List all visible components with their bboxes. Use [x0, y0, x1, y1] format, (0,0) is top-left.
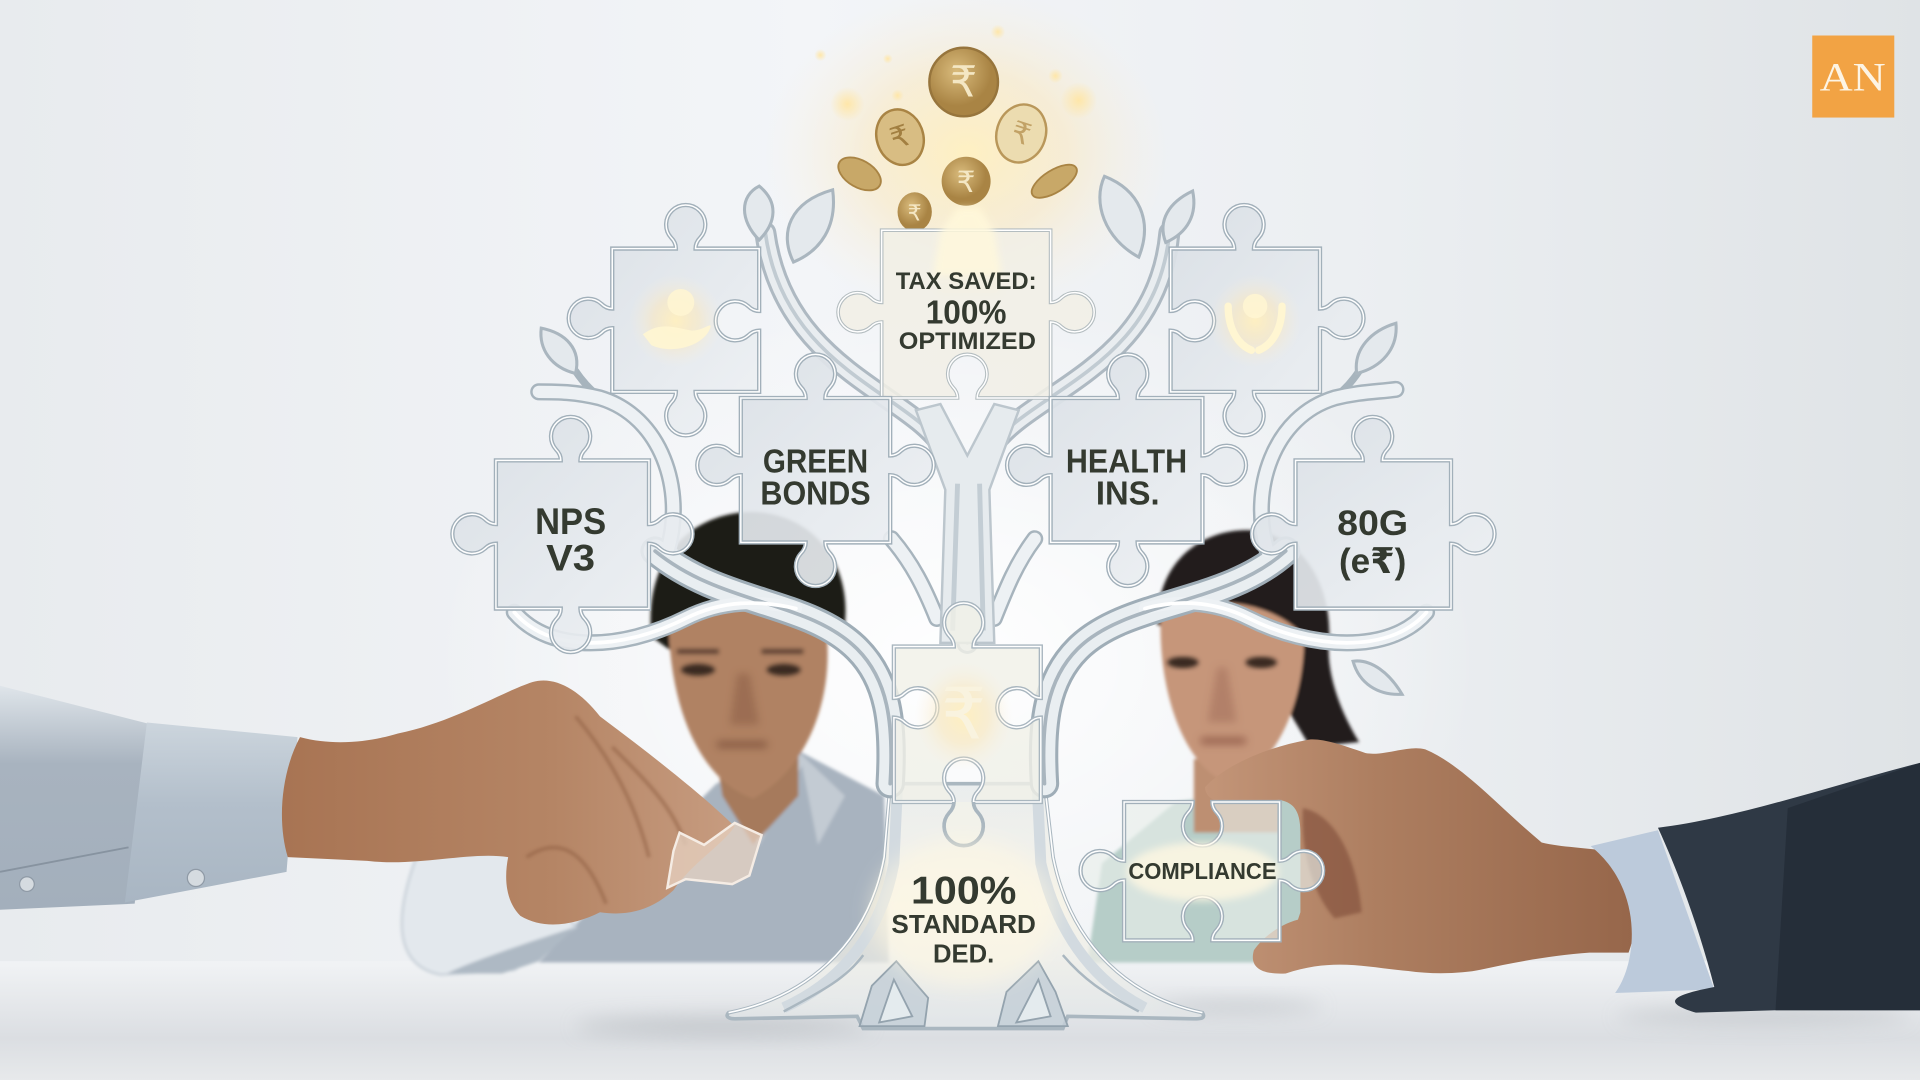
coin: top: ₹	[950, 58, 977, 108]
glass leaves	[541, 176, 1402, 694]
sleeve fold line	[0, 847, 129, 872]
label: tax saved: 100%	[926, 294, 1007, 331]
cuff buttons	[20, 869, 204, 891]
rupee coins	[833, 48, 1082, 231]
man torso	[539, 749, 889, 962]
golden glow	[765, 0, 1169, 318]
label: tax saved: OPTIMIZED	[899, 328, 1036, 355]
coin: middle: ₹	[957, 165, 975, 199]
label: 80g e-rupee	[1337, 503, 1408, 581]
man behind the tree	[402, 512, 889, 975]
coin: upper right	[989, 98, 1054, 169]
logo	[1812, 36, 1894, 118]
woman eyes	[1167, 656, 1277, 669]
small glass piece in left hand	[667, 823, 762, 888]
man hair	[651, 512, 846, 661]
branches outline	[655, 551, 1286, 784]
man face	[669, 597, 828, 798]
coin: upper left	[869, 103, 931, 171]
label: tax saved: TAX SAVED:	[896, 268, 1037, 295]
label: nps v3	[535, 501, 606, 579]
table shadows	[576, 1000, 1910, 1036]
left hand	[282, 680, 735, 925]
coin: top	[929, 48, 998, 116]
leaf: mid right	[1356, 323, 1396, 373]
puzzle piece: top left hand icon	[569, 205, 759, 435]
woman hair	[1157, 530, 1359, 747]
puzzle piece: trunk rupee	[894, 603, 1041, 846]
man collar	[722, 749, 845, 845]
coin: lower: ₹	[908, 201, 922, 226]
leaf: top right outer	[1163, 191, 1194, 242]
right cuff	[1591, 830, 1714, 993]
central trunk highlight	[953, 484, 983, 631]
icon: coin in hands	[1243, 294, 1267, 318]
puzzle piece: green bonds	[697, 354, 934, 586]
label: 100% standard deduction: STANDARD	[891, 911, 1036, 939]
coin: lower	[898, 192, 932, 231]
branches highlight	[655, 551, 1286, 784]
label: nps v3: NPS	[535, 501, 606, 542]
logo: AN	[1820, 55, 1886, 100]
woman clothing	[1087, 784, 1386, 962]
trunk label glow	[872, 839, 1056, 986]
puzzle piece: top right hands icon	[1171, 205, 1364, 435]
label: tax saved	[896, 268, 1037, 355]
label: health ins	[1066, 444, 1187, 512]
woman nose and mouth	[1200, 667, 1247, 744]
label: compliance: COMPLIANCE	[1128, 858, 1277, 884]
label: health ins: HEALTH	[1066, 444, 1187, 481]
icon: hand holding coin	[643, 289, 711, 349]
finger shadows	[1303, 808, 1362, 918]
puzzle piece: tax saved	[838, 208, 1094, 398]
left cuff	[125, 722, 298, 902]
man sleeve	[402, 851, 576, 975]
label: nps v3: V3	[546, 538, 595, 579]
label: 80g e-rupee: (e₹)	[1339, 541, 1406, 581]
man sleeve shadow	[447, 927, 576, 973]
suit shading	[1776, 763, 1920, 1010]
woman behind the tree	[1087, 530, 1386, 962]
leaf: top left outer	[744, 186, 773, 240]
left sleeve	[0, 686, 298, 910]
puzzle piece: 80g	[1252, 417, 1495, 609]
right suit sleeve	[1658, 763, 1920, 1013]
coin: upper left: ₹	[886, 118, 914, 156]
sparkles	[814, 24, 1097, 159]
leaf: lower right	[1353, 661, 1402, 694]
label: 100% standard deduction	[891, 870, 1036, 968]
right hand	[1205, 739, 1637, 974]
label: green bonds	[760, 444, 871, 512]
label: 100% standard deduction: 100%	[911, 870, 1016, 913]
man nose shadow and mouth	[716, 673, 768, 748]
label: 100% standard deduction: DED.	[933, 940, 994, 968]
trunk wall bands	[784, 784, 1145, 1008]
central wall highlight	[429, 294, 1482, 1029]
man eyes	[677, 649, 803, 676]
puzzle piece: compliance	[1081, 802, 1323, 940]
leaf: mid left	[541, 328, 577, 373]
puzzle piece: health insurance	[1007, 354, 1246, 586]
coin: middle right	[1027, 158, 1082, 204]
coin: middle left	[833, 151, 886, 197]
light beam	[937, 208, 1002, 294]
coin: upper right: ₹	[1007, 114, 1035, 152]
leaf: top left inner	[787, 190, 833, 262]
label: green bonds: BONDS	[760, 475, 871, 512]
glass tree branches	[514, 233, 1427, 784]
trunk roots	[860, 961, 1068, 1026]
label: health ins: INS.	[1096, 475, 1160, 512]
lower connecting knob	[944, 802, 983, 846]
label: green bonds: GREEN	[763, 444, 868, 481]
puzzle piece: nps v3	[452, 417, 693, 652]
coin: middle	[942, 157, 991, 206]
finger creases	[527, 716, 686, 904]
table surface	[0, 961, 1920, 1080]
central trunk column	[916, 404, 1019, 643]
label: 80g e-rupee: 80G	[1337, 503, 1408, 543]
rupee glyph: ₹	[941, 672, 986, 755]
glass tree trunk base	[727, 784, 1204, 1029]
icon: cupped hands	[1228, 306, 1282, 350]
woman face	[1161, 602, 1304, 784]
leaf: top right inner	[1100, 176, 1144, 257]
branches inner glass	[655, 551, 1286, 784]
woman neck	[1194, 759, 1280, 833]
man neck	[713, 735, 798, 845]
